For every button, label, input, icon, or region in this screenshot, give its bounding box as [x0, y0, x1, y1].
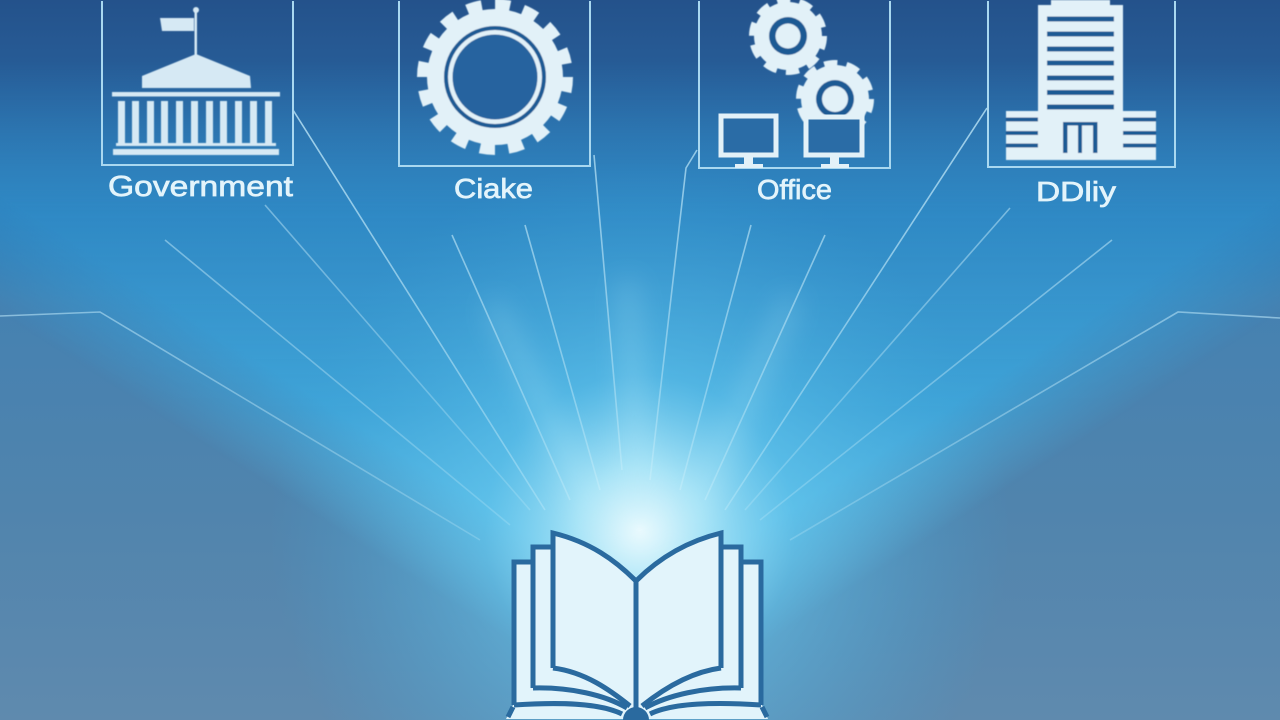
icon: open book — [506, 533, 768, 720]
panel: office — [699, 1, 890, 205]
frame: gear — [399, 1, 590, 166]
label: DDliy: DDliy — [1036, 176, 1116, 207]
panel: gear — [399, 1, 590, 204]
frame: government — [102, 1, 293, 165]
light rays — [0, 108, 1280, 540]
label: Ciake: Ciake — [454, 173, 533, 204]
label: Government: Government — [108, 171, 293, 203]
panel: tower — [988, 0, 1175, 207]
frame: tower — [988, 1, 1175, 167]
icon: right monitor — [806, 117, 862, 168]
icon: office gears — [753, 1, 870, 134]
label: Office: Office — [757, 174, 832, 205]
panel: government — [102, 1, 293, 203]
icon: tower building — [1006, 0, 1156, 160]
icon: left monitor — [721, 116, 776, 168]
icon: large gear — [423, 5, 567, 149]
frame: office — [699, 1, 890, 168]
icon: government building — [112, 7, 280, 155]
